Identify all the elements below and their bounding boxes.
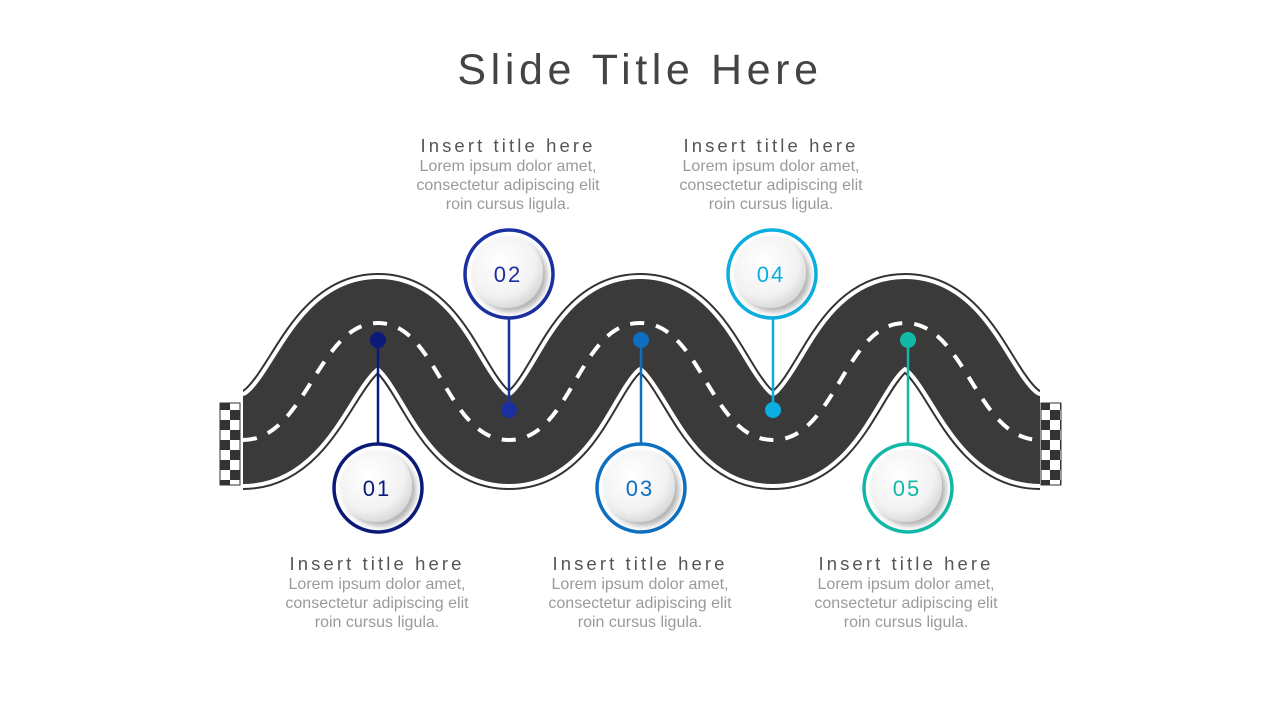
text block 03: consectetur adipiscing elit xyxy=(548,595,732,612)
icon: checkered flag right xyxy=(1041,403,1061,485)
marker 04 xyxy=(728,230,816,418)
marker 01: 01 xyxy=(363,476,391,501)
text block 05: Insert title here xyxy=(818,553,994,574)
marker 05: 05 xyxy=(893,476,921,501)
text block 03: roin cursus ligula. xyxy=(578,614,702,631)
text block 05 xyxy=(814,553,998,631)
text block 02 xyxy=(416,135,600,213)
marker 03 xyxy=(597,332,685,532)
text block 03: Lorem ipsum dolor amet, xyxy=(552,576,728,593)
marker 03: 03 xyxy=(626,476,654,501)
text block 02: Lorem ipsum dolor amet, xyxy=(420,158,596,175)
marker 02 xyxy=(465,230,553,418)
marker 01 xyxy=(334,332,422,532)
text block 01 xyxy=(285,553,469,631)
text block 05: Lorem ipsum dolor amet, xyxy=(818,576,994,593)
text block 02: consectetur adipiscing elit xyxy=(416,177,600,194)
text block 01: Insert title here xyxy=(289,553,465,574)
marker 04: 04 xyxy=(757,262,785,287)
text block 01: Lorem ipsum dolor amet, xyxy=(289,576,465,593)
text block 03 xyxy=(548,553,732,631)
text block 04: Lorem ipsum dolor amet, xyxy=(683,158,859,175)
marker 02: 02 xyxy=(494,262,522,287)
text block 01: consectetur adipiscing elit xyxy=(285,595,469,612)
text block 02: roin cursus ligula. xyxy=(446,196,570,213)
text block 01: roin cursus ligula. xyxy=(315,614,439,631)
text block 05: consectetur adipiscing elit xyxy=(814,595,998,612)
title: Slide Title Here xyxy=(457,46,823,94)
text block 04: consectetur adipiscing elit xyxy=(679,177,863,194)
text block 03: Insert title here xyxy=(552,553,728,574)
text block 04: roin cursus ligula. xyxy=(709,196,833,213)
text block 05: roin cursus ligula. xyxy=(844,614,968,631)
icon: checkered flag left xyxy=(220,403,240,485)
text block 04: Insert title here xyxy=(683,135,859,156)
text block 02: Insert title here xyxy=(420,135,596,156)
road xyxy=(200,323,1081,500)
text block 04 xyxy=(679,135,863,213)
marker 05 xyxy=(864,332,952,532)
